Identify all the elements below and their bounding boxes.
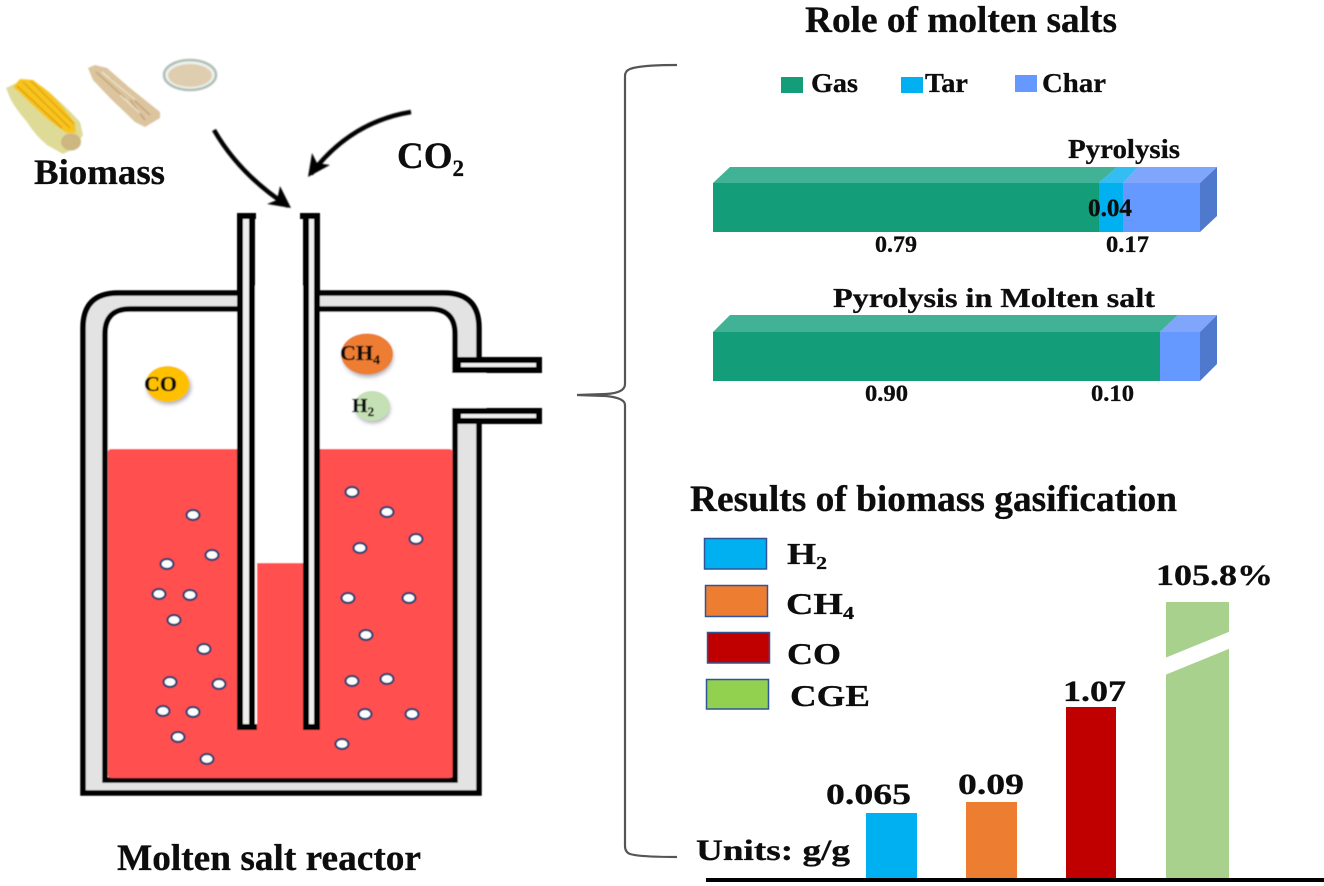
icon: dish of biomass powder [164,60,216,90]
legend: gases and CGE: CH [786,586,832,621]
arrow: biomass into reactor [214,130,291,208]
label: Molten salt reactor: Molten salt reactor [117,838,421,879]
molten salt pool [108,449,452,778]
diagram: molten salt reactor [83,213,539,793]
legend: products: Tar [925,68,968,98]
gas bubble: H2 [352,391,390,423]
reactor inner chamber [105,309,455,780]
stacked bar: pyrolysis in molten salt [713,283,1217,406]
panel: results of biomass gasification [690,479,1324,882]
bar: H2 0.065: 0.065 [826,778,911,811]
bar: CGE 105.8% with axis break [1156,559,1273,879]
stacked bar: pyrolysis: 0.17 [1106,232,1149,257]
stacked bar: pyrolysis: Pyrolysis [1068,134,1180,164]
units label: Units: g/g [696,834,850,867]
legend: gases and CGE: 4 [843,603,854,623]
heading: Role of molten salts: Role of molten salts [805,0,1117,41]
stacked bar: pyrolysis in molten salt: 0.10 [1091,381,1134,406]
legend: products: Char [1042,68,1106,98]
legend: gases and CGE: 2 [816,553,827,573]
legend: gases and CGE: CO [787,636,841,671]
panel: biomass feed [6,60,291,208]
panel: carbon dioxide feed [308,112,464,181]
molten salt in tube [257,563,303,738]
gas bubble: CH4 [340,334,393,377]
legend: gases and CGE: CGE [790,678,870,713]
bar: CO 1.07 [1063,675,1126,879]
bar: CH4 0.09 [958,768,1024,879]
bar: CGE 105.8% with axis break: 105.8% [1156,559,1273,592]
gas bubble: CH4: CH [340,341,371,365]
gas bubble: H2: H [352,395,368,417]
gas bubble: CO: CO [144,372,177,396]
gas bubble: H2: 2 [368,404,374,419]
bar: CH4 0.09: 0.09 [958,768,1024,801]
gas bubbles [152,487,422,764]
arrow: CO2 into reactor [308,112,411,177]
legend: products: Gas [811,68,858,98]
legend: gases and CGE: H [787,536,811,571]
gas bubble: CO [144,366,191,404]
icon: stripped corn cob [88,65,160,127]
panel: role of molten salts [713,0,1217,406]
outlet opening [450,373,486,408]
stacked bar: pyrolysis in molten salt: 0.90 [865,381,908,406]
legend: products [781,68,1106,98]
bar: H2 0.065 [826,778,917,879]
stacked bar: pyrolysis: 0.04 [1088,195,1133,222]
stacked bar: pyrolysis: 0.79 [875,232,917,257]
label: CO2: 2 [452,156,464,181]
outlet pipe upper wall [458,360,539,370]
gas bubble: CH4: 4 [373,352,381,367]
central tube channel [255,286,303,563]
heading: Results of biomass gasification: Results of biomass gasification [690,479,1177,520]
icon: corn cob with husk [6,79,83,154]
white strip beside tube [254,563,257,728]
label: CO2: CO [397,136,452,177]
tube left wall [237,213,257,730]
tube right wall [300,213,320,727]
baseline axis [706,878,1324,882]
stacked bar: pyrolysis in molten salt: Pyrolysis in Molten salt [833,283,1155,313]
bracket [577,65,677,857]
stacked bar: pyrolysis [713,134,1217,257]
outlet pipe lower wall [458,411,539,421]
bar: CO 1.07: 1.07 [1063,675,1126,708]
reactor outer wall [83,293,479,793]
legend: gases and CGE [704,536,870,713]
label: Biomass: Biomass [34,152,165,192]
